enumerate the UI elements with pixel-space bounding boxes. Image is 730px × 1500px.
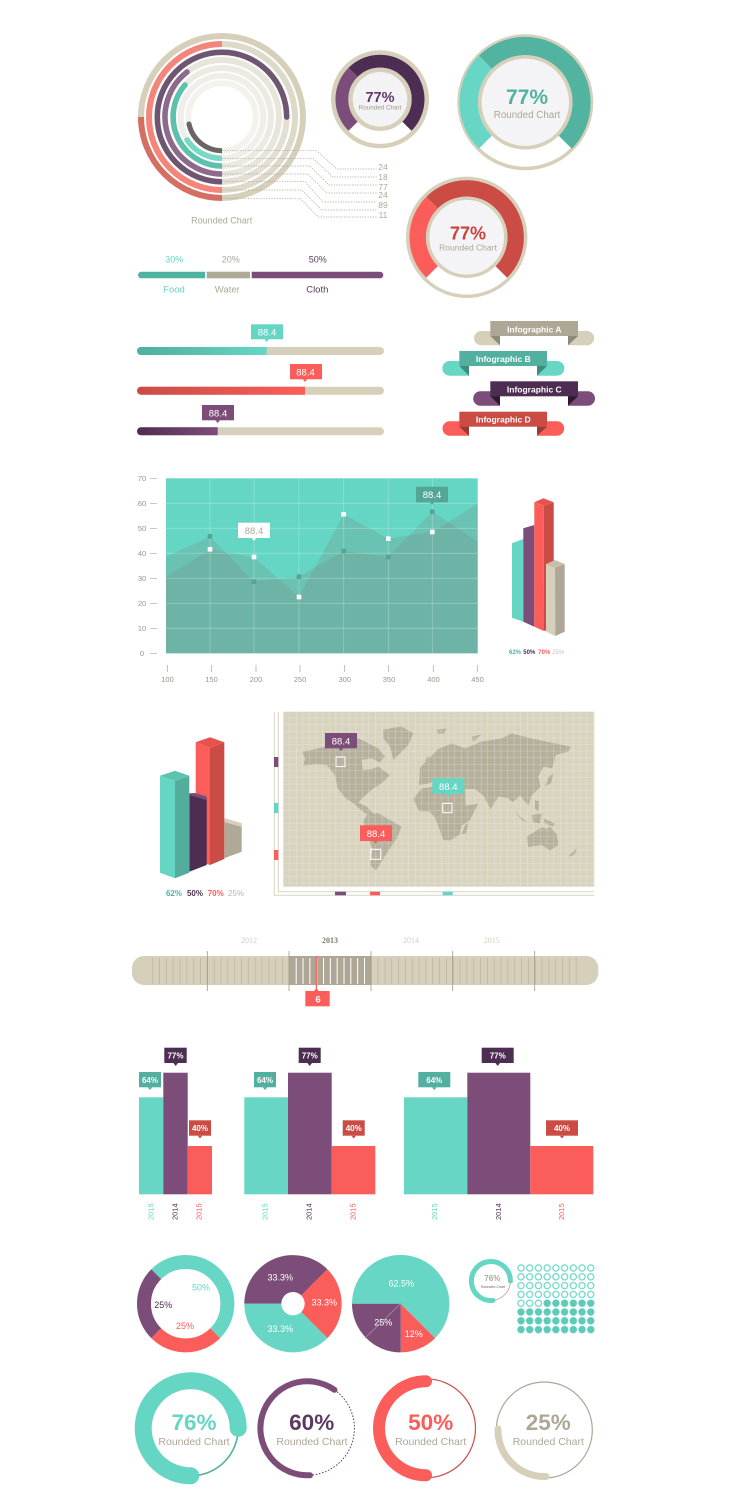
concentric chart values: 89	[378, 200, 388, 210]
bar chart: wide: 2015	[557, 1203, 566, 1220]
bar chart: wide: 40%	[554, 1124, 570, 1133]
ribbon: Infographic C: Infographic C	[507, 384, 562, 394]
ring chart: red	[408, 178, 526, 296]
ring chart: teal: 77%	[506, 86, 548, 109]
bar chart: wide: 2015	[430, 1203, 439, 1220]
area chart callout: teal	[416, 487, 448, 505]
x axis: 350	[383, 675, 395, 684]
ring chart: red: Rounded Chart	[439, 243, 497, 253]
map callout: purple: 88.4	[332, 736, 350, 748]
concentric chart values: 77	[378, 182, 388, 192]
ring chart: red: 77%	[450, 224, 486, 244]
rounded chart 50%	[379, 1379, 476, 1478]
rounded chart 50%: Rounded Chart	[395, 1436, 466, 1448]
concentric chart leader lines	[222, 151, 377, 217]
ribbon: Infographic D	[442, 412, 564, 436]
x axis: 200	[250, 675, 262, 684]
large 3D bar chart: 25%	[228, 889, 244, 898]
y axis: 50	[138, 524, 146, 533]
ribbon: Infographic A: Infographic A	[507, 324, 562, 334]
pie chart: 62.5/25/12: 12%	[405, 1329, 423, 1339]
ribbon: Infographic B	[442, 351, 564, 376]
x axis: 250	[294, 675, 306, 684]
large 3D bar chart	[160, 737, 244, 898]
progress bar: teal: 88.4	[258, 327, 276, 338]
concentric chart values	[378, 162, 388, 220]
ribbon: Infographic D: Infographic D	[476, 414, 531, 424]
timeline marker: 6	[315, 994, 321, 1006]
timeline year labels: 2014	[403, 936, 419, 945]
concentric chart values: 24	[378, 190, 388, 200]
pie chart: three thirds: 33.3%	[268, 1324, 293, 1334]
stacked bar: food, water, cloth: 50%	[309, 254, 327, 264]
map callout: purple	[325, 733, 357, 767]
bar chart: narrow: 77%	[167, 1052, 184, 1060]
timeline year labels: 2015	[484, 936, 500, 945]
small 3D bar chart: 70%	[538, 650, 551, 656]
bar chart: narrow: 2014	[171, 1203, 180, 1220]
ring chart: purple: 77%	[365, 90, 395, 106]
bar chart: narrow: 2015	[146, 1203, 155, 1220]
bar chart: medium: 2014	[305, 1203, 314, 1220]
pie chart: three thirds: 33.3%	[268, 1272, 293, 1282]
timeline year labels: 2013	[322, 936, 338, 945]
y axis: 30	[138, 574, 146, 583]
x axis: 450	[471, 675, 484, 684]
pie chart: three thirds: 33.3%	[312, 1298, 337, 1308]
concentric chart caption: Rounded Chart	[191, 216, 253, 226]
map frame	[274, 712, 594, 895]
rounded chart 60%	[260, 1381, 354, 1475]
continents	[302, 727, 577, 871]
rounded chart 25%: Rounded Chart	[513, 1436, 584, 1448]
rounded chart 50%: 50%	[408, 1410, 453, 1435]
area chart callout: teal: 88.4	[423, 490, 441, 501]
progress bar: teal	[137, 324, 384, 355]
x axis: 150	[205, 675, 218, 684]
map callout: red	[360, 825, 392, 859]
rounded chart 25%	[496, 1382, 592, 1478]
stacked bar: food, water, cloth: Cloth	[306, 285, 328, 296]
donut chart: 50/25/25	[144, 1262, 227, 1345]
donut chart: 50/25/25: 25%	[154, 1300, 172, 1310]
y axis: 70	[138, 474, 146, 483]
large 3D bar chart: 62%	[166, 889, 182, 898]
x axis: 100	[161, 675, 174, 684]
bar chart: wide: 2014	[494, 1203, 503, 1220]
area chart plot	[166, 478, 478, 653]
stacked bar: food, water, cloth: Water	[215, 285, 240, 296]
progress bar: purple	[137, 405, 384, 435]
progress bar: red: 88.4	[296, 367, 315, 378]
pie chart: 62.5/25/12	[352, 1255, 449, 1352]
area chart callout: white: 88.4	[245, 526, 263, 537]
x axis: 300	[338, 675, 351, 684]
timeline track	[132, 956, 598, 985]
y axis	[138, 474, 157, 658]
stacked bar: food, water, cloth: 30%	[165, 254, 183, 264]
concentric chart values: 18	[378, 172, 388, 182]
concentric chart values: 11	[379, 210, 388, 220]
map callout: teal	[432, 778, 464, 813]
x axis: 400	[427, 675, 440, 684]
timeline ticks	[152, 951, 583, 991]
bar chart: wide: 64%	[426, 1076, 442, 1085]
y axis: 60	[138, 499, 146, 508]
ring chart: purple: Rounded Chart	[359, 104, 402, 111]
pie chart: 62.5/25/12: 25%	[374, 1318, 392, 1328]
bar chart: wide	[404, 1048, 593, 1220]
y axis: 0	[140, 649, 144, 658]
x axis	[161, 665, 484, 684]
bar chart: narrow: 64%	[142, 1076, 158, 1085]
rounded chart 25%: 25%	[526, 1410, 571, 1435]
ring chart: purple	[333, 53, 427, 146]
rounded chart 76%	[143, 1381, 238, 1476]
small ring chart 76%: 76%	[484, 1274, 500, 1283]
ring chart: teal: Rounded Chart	[494, 110, 560, 121]
stacked bar: food, water, cloth: Food	[163, 285, 185, 296]
donut chart: 50/25/25: 25%	[176, 1321, 194, 1331]
large 3D bar chart: 70%	[208, 889, 224, 898]
donut chart: 50/25/25: 50%	[192, 1282, 210, 1292]
ribbon: Infographic B: Infographic B	[476, 354, 531, 364]
timeline	[132, 936, 598, 1006]
large 3D bar chart: 50%	[187, 889, 203, 898]
dot matrix	[517, 1264, 595, 1334]
bar chart: medium: 64%	[257, 1076, 273, 1085]
ring chart: teal	[459, 36, 592, 168]
timeline marker	[305, 988, 330, 1006]
bar chart: medium: 77%	[302, 1052, 318, 1060]
ribbon: Infographic A	[474, 321, 594, 345]
ribbon: Infographic C	[473, 381, 595, 406]
rounded chart 76%: 76%	[171, 1410, 217, 1435]
pie chart: 62.5/25/12: 62.5%	[389, 1278, 414, 1288]
small 3D bar chart: 25%	[552, 650, 565, 656]
map grid	[283, 712, 594, 887]
bar chart: narrow: 40%	[192, 1124, 208, 1133]
stacked bar: food, water, cloth	[138, 254, 383, 296]
timeline year labels: 2012	[241, 936, 257, 945]
area chart callout: white	[238, 523, 270, 541]
concentric rounded chart	[141, 36, 303, 198]
concentric chart values: 24	[378, 162, 388, 172]
map callout: teal: 88.4	[439, 782, 458, 793]
small 3D bar chart	[509, 498, 565, 656]
rounded chart 60%: 60%	[289, 1410, 334, 1435]
bar chart: medium	[244, 1048, 375, 1220]
small 3D bar chart: 50%	[523, 650, 536, 656]
area chart	[138, 474, 484, 684]
y axis: 40	[138, 549, 146, 558]
stacked bar: food, water, cloth: 20%	[222, 254, 240, 264]
world map	[274, 712, 594, 895]
rounded chart 76%: Rounded Chart	[158, 1436, 230, 1448]
map background	[283, 712, 594, 887]
bar chart: wide: 77%	[490, 1052, 506, 1060]
axis markers	[274, 757, 453, 895]
bar chart: medium: 40%	[346, 1124, 362, 1133]
progress bar: purple: 88.4	[209, 408, 227, 419]
pie chart: three thirds	[244, 1255, 342, 1352]
small ring chart 76%	[471, 1262, 510, 1301]
map callout: red: 88.4	[367, 829, 385, 840]
bar chart: medium: 2015	[261, 1203, 270, 1220]
y axis: 20	[138, 599, 146, 608]
small ring chart 76%: Rounded Chart	[481, 1285, 505, 1289]
rounded chart 60%: Rounded Chart	[276, 1436, 348, 1448]
y axis: 10	[138, 624, 146, 633]
bar chart: medium: 2015	[349, 1203, 358, 1220]
timeline year labels	[241, 936, 500, 945]
bar chart: narrow	[139, 1048, 212, 1220]
progress bar: red	[137, 364, 384, 395]
small 3D bar chart: 62%	[509, 650, 522, 656]
bar chart: narrow: 2015	[195, 1203, 204, 1220]
